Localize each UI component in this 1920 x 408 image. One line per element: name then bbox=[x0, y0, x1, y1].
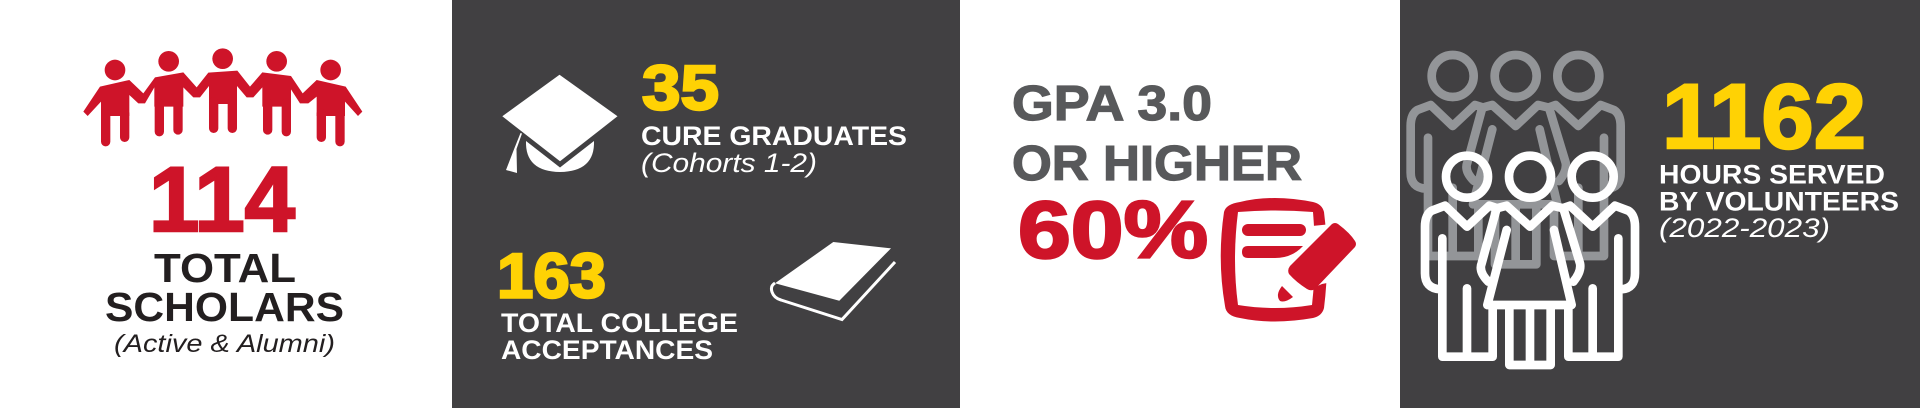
panel background bbox=[1400, 0, 1920, 408]
icon: back row of people bbox=[1411, 55, 1621, 264]
sublabel: years: (2022-2023) bbox=[1659, 213, 1830, 243]
heading: gpa 3.0 or higher: GPA 3.0 bbox=[1012, 77, 1212, 131]
number: 163: 163 bbox=[497, 242, 606, 312]
label: hours served by volunteers bbox=[1659, 160, 1899, 216]
number: 60 percent: 60% bbox=[1018, 186, 1208, 276]
icon: five people holding hands bbox=[83, 48, 362, 142]
label: total college acceptances: ACCEPTANCES bbox=[501, 335, 713, 365]
panel background bbox=[452, 0, 960, 408]
label: total college acceptances: TOTAL COLLEGE bbox=[501, 308, 738, 338]
icon: graduation cap bbox=[502, 75, 618, 173]
icon: book bbox=[771, 242, 895, 320]
number: 1162: 1162 bbox=[1662, 66, 1866, 168]
sublabel: cohorts: (Cohorts 1-2) bbox=[641, 148, 817, 178]
label: hours served by volunteers: HOURS SERVED bbox=[1659, 160, 1885, 190]
label: total college acceptances bbox=[501, 308, 738, 365]
number: 35: 35 bbox=[642, 54, 719, 124]
label: total scholars bbox=[105, 245, 344, 330]
label: total scholars: SCHOLARS bbox=[105, 284, 344, 330]
icon: front row of people bbox=[1425, 156, 1635, 365]
sublabel: active and alumni: (Active & Alumni) bbox=[114, 330, 335, 358]
label: cure graduates: CURE GRADUATES bbox=[641, 121, 907, 151]
heading: gpa 3.0 or higher bbox=[1012, 77, 1302, 191]
heading: gpa 3.0 or higher: OR HIGHER bbox=[1012, 137, 1302, 191]
panel: total scholars bbox=[83, 48, 362, 358]
number: 114: 114 bbox=[149, 149, 295, 251]
label: hours served by volunteers: BY VOLUNTEERS bbox=[1659, 186, 1899, 216]
label: total scholars: TOTAL bbox=[154, 245, 296, 291]
panel: graduates and acceptances bbox=[452, 0, 960, 408]
panel: gpa bbox=[1012, 77, 1356, 322]
icon: document with pencil bbox=[1221, 198, 1356, 322]
panel: volunteers bbox=[1400, 0, 1920, 408]
